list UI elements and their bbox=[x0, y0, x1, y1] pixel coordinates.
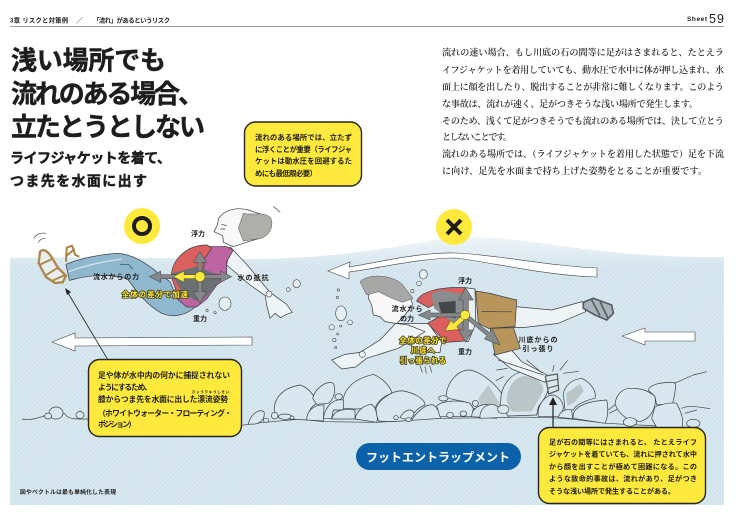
rocks on the river bed bbox=[22, 370, 710, 427]
illustration: wrong posture: 引っ張り bbox=[522, 344, 554, 353]
header: chapter breadcrumb: 3章 リスクと対策例 bbox=[10, 16, 68, 24]
head bbox=[368, 282, 412, 324]
label: foot entrapment: フットエントラップメント bbox=[366, 450, 510, 464]
header: chapter breadcrumb: 「流れ」があるというリスク bbox=[93, 16, 170, 24]
sandal bbox=[583, 298, 613, 320]
callout: foot entrapment explanation: 足が石の間等にはさまれると、 たとえライフ bbox=[549, 438, 697, 446]
title: 浅い場所でも bbox=[11, 46, 166, 76]
callout: recommended posture: 足や体が水中内の何かに捕捉されない bbox=[98, 370, 230, 380]
yellow callout: stay afloat bbox=[244, 122, 362, 186]
near leg bbox=[513, 302, 586, 327]
force arrows bbox=[418, 310, 465, 320]
force labels: 浮力 bbox=[458, 276, 472, 285]
illustration: correct floating posture: 水の抵抗 bbox=[238, 273, 268, 282]
illustration: wrong posture: 全体の差分で bbox=[400, 336, 446, 345]
yellow callout: stay afloat: ケットは動水圧を回避するた bbox=[255, 156, 352, 166]
callout: foot entrapment explanation: ような致命的事故は、流れがあり、足がつき bbox=[549, 474, 697, 483]
body text bbox=[442, 46, 725, 176]
life jacket bbox=[171, 245, 212, 292]
subtitle: つま先を水面に出す bbox=[10, 173, 147, 189]
body text: な事故は、流れが速く、足がつきそうな浅い場所で発生します。 bbox=[442, 98, 698, 109]
callout: recommended posture: ひょうりゅうしせい bbox=[192, 389, 230, 394]
leader line to left feet bbox=[65, 288, 108, 360]
header: chapter breadcrumb: ／ bbox=[76, 16, 83, 24]
near sandal bbox=[39, 250, 66, 283]
bubbles bbox=[219, 297, 231, 310]
far leg bbox=[493, 348, 548, 382]
illustration: wrong posture: の力 bbox=[400, 314, 414, 323]
body text: 流れの速い場合、もし川底の石の間等に足がはさまれると、たとえラ bbox=[442, 46, 724, 58]
net force arrow bbox=[173, 271, 200, 282]
body text: に向け、足先を水面まで持ち上げた姿勢をとることが重要です。 bbox=[442, 165, 707, 176]
body text: イフジャケットを着用していても、動水圧で水中に体が押し込まれ、水 bbox=[442, 64, 724, 75]
shirt bbox=[177, 247, 233, 307]
callout: foot entrapment explanation: から顔を出すことが極めて困難になる。この bbox=[549, 462, 697, 471]
illustration: correct floating posture: 流水からの力 bbox=[93, 272, 139, 281]
rocks right bbox=[480, 372, 710, 427]
callout: recommended posture: ポジション） bbox=[98, 420, 136, 429]
head bbox=[214, 209, 268, 247]
page number bbox=[687, 12, 724, 26]
illustration: wrong posture: 川底からの bbox=[518, 335, 558, 344]
illustration: wrong posture bbox=[329, 270, 613, 394]
callout: foot entrapment explanation bbox=[538, 428, 706, 504]
subtitle bbox=[10, 150, 171, 189]
illustration: wrong posture: 引っ張られる bbox=[400, 356, 446, 365]
yellow callout: stay afloat: めにも最低限必要） bbox=[255, 169, 317, 178]
subtitle: ライフジャケットを着て、 bbox=[10, 150, 171, 166]
icon: correct mark bbox=[124, 208, 160, 244]
torso bbox=[397, 323, 442, 352]
illustration: wrong posture: 川底へ bbox=[411, 346, 435, 355]
icon: wrong mark bbox=[436, 209, 472, 245]
hair bbox=[360, 276, 413, 302]
title bbox=[11, 46, 205, 142]
far sandal bbox=[66, 246, 79, 262]
callout: recommended posture: 膝からつま先を水面に出した漂流姿勢 bbox=[98, 394, 228, 404]
callout: recommended posture: ようにするため、 bbox=[98, 382, 152, 392]
shorts bbox=[476, 291, 517, 328]
illustration: wrong posture: 流水から bbox=[392, 304, 422, 313]
yellow callout: stay afloat: 流れのある場所では、立たず bbox=[255, 133, 353, 142]
label: foot entrapment bbox=[356, 443, 521, 470]
body text: 面上に顔を出したり、脱出することが非常に難しくなります。このよう bbox=[442, 81, 724, 92]
body text: そのため、浅くて足がつきそうでも流れのある場所では、決して立とう bbox=[442, 115, 724, 126]
leader line to trapped foot bbox=[549, 397, 557, 428]
title: 流れのある場合、 bbox=[11, 79, 204, 109]
illustration: wrong posture: 重力 bbox=[458, 347, 472, 356]
body text: 流れのある場所では、（ライフジャケットを着用した状態で）足を下流 bbox=[442, 148, 725, 159]
callout: recommended posture bbox=[88, 360, 242, 436]
bubbles bbox=[419, 270, 427, 279]
callout: foot entrapment explanation: ジャケットを着ていても、流れに押されて水中 bbox=[549, 450, 697, 458]
flow arrow over wrong posture bbox=[328, 253, 597, 279]
page number: 59 bbox=[709, 12, 724, 26]
net force arrow bbox=[445, 314, 467, 331]
rocks centre bbox=[240, 370, 505, 426]
title: 立たとうとしない bbox=[11, 112, 205, 142]
force labels: 浮力 bbox=[191, 229, 205, 238]
yellow callout: stay afloat: に浮くことが重要（ライフジャ bbox=[255, 145, 352, 154]
water background bbox=[10, 237, 724, 505]
arm bbox=[227, 247, 292, 318]
body text: としないことです。 bbox=[442, 132, 512, 142]
illustration: correct floating posture: 重力 bbox=[193, 314, 207, 323]
flow arrow right bbox=[622, 328, 695, 345]
page number: Sheet bbox=[687, 16, 708, 23]
footnote: 図やベクトルは最も単純化した表現 bbox=[20, 488, 116, 496]
life jacket bbox=[417, 288, 467, 308]
callout: recommended posture: （ホワイトウォーター・フローティング・ bbox=[98, 408, 232, 418]
illustration: correct floating posture bbox=[34, 207, 300, 323]
jeans bbox=[66, 253, 195, 316]
header: chapter breadcrumb bbox=[10, 16, 724, 27]
arm bbox=[332, 323, 425, 369]
force arrows bbox=[149, 252, 232, 303]
flow arrow upper-left bbox=[52, 333, 252, 351]
callout: foot entrapment explanation: そうな浅い場所で発生することがある。 bbox=[549, 486, 675, 496]
trapped foot bbox=[496, 360, 579, 394]
illustration: correct floating posture: 全体の差分で加速 bbox=[122, 290, 188, 299]
